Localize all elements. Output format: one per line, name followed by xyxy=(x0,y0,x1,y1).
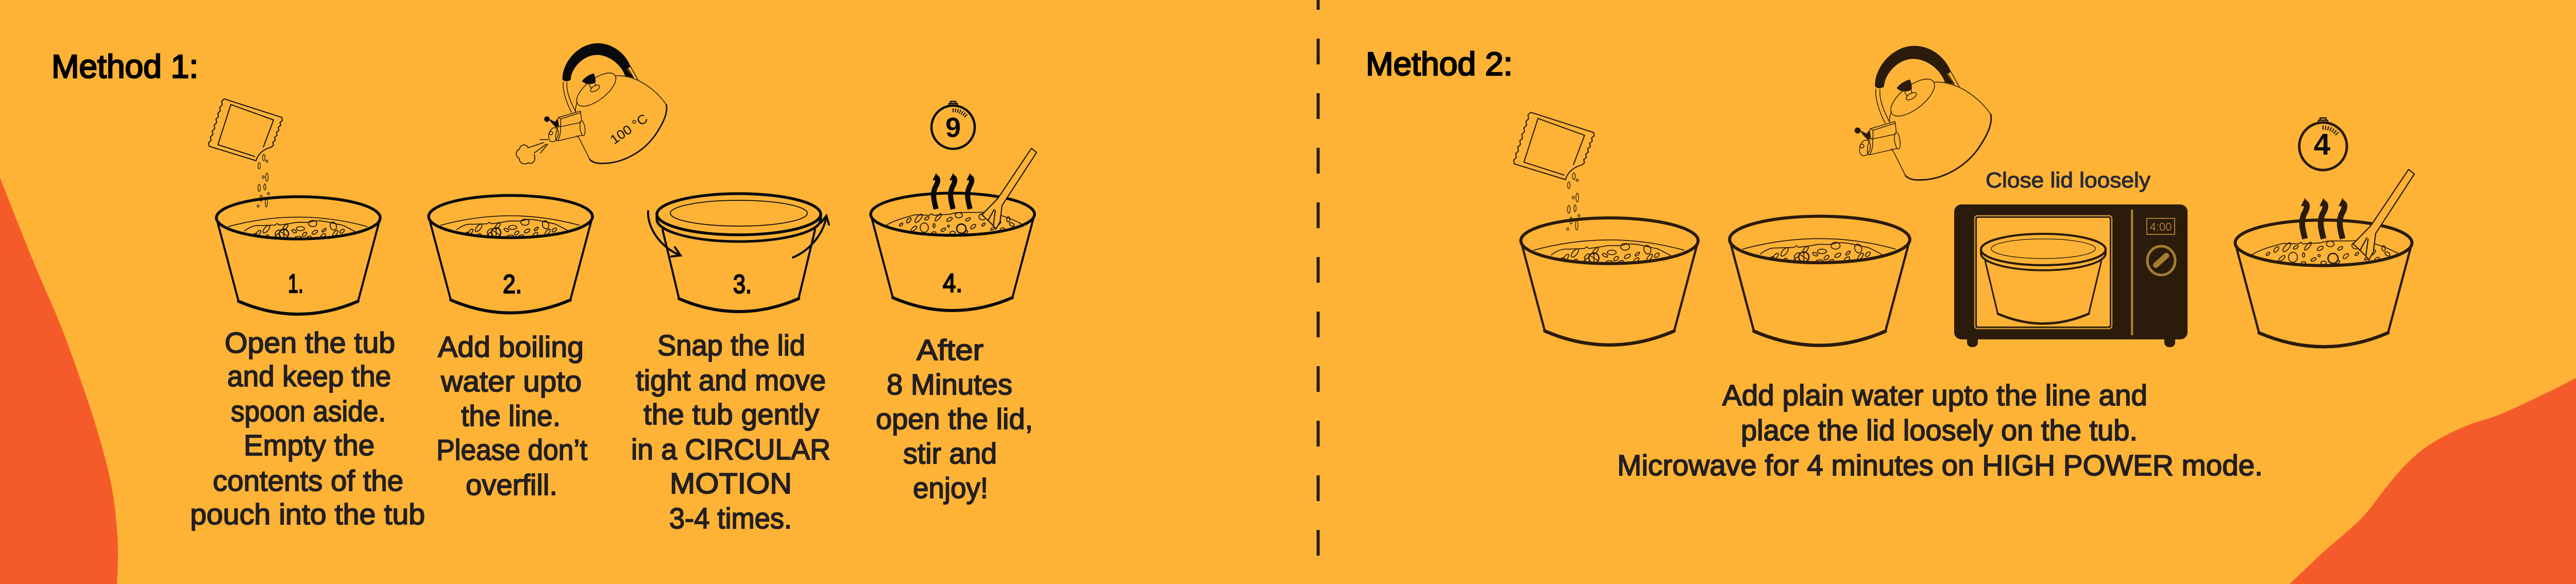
tub 2: 2. xyxy=(503,269,522,299)
step 3 text: in a CIRCULAR xyxy=(631,433,831,466)
step 4 text: enjoy! xyxy=(913,472,988,505)
step 2 text: water upto xyxy=(440,365,582,398)
dashed divider xyxy=(1317,0,1320,556)
icon: pouch pouring xyxy=(1514,112,1594,230)
step 2 text: Please don’t xyxy=(436,434,587,467)
panel: method 2 xyxy=(1366,45,2414,482)
timer 4: 4 xyxy=(2314,128,2330,161)
step 2 text xyxy=(436,331,587,502)
tub A xyxy=(1521,218,1698,345)
step 2 text: Add boiling xyxy=(438,331,584,364)
right orange corner shape xyxy=(2290,338,2576,584)
step 1 text: contents of the xyxy=(213,465,403,497)
tub B xyxy=(1730,216,1910,346)
timer 9 xyxy=(931,101,975,149)
step 3 text: Snap the lid xyxy=(657,329,805,362)
step 4 text: stir and xyxy=(903,437,997,470)
heading: method 1: Method 1: xyxy=(52,48,198,85)
heading: method 2: Method 2: xyxy=(1366,45,1513,82)
tub 4 with steam and fork: 4. xyxy=(943,268,962,298)
method 2 instructions text: Microwave for 4 minutes on HIGH POWER mode. xyxy=(1617,449,2263,482)
step 4 text: 8 Minutes xyxy=(887,368,1012,401)
step 2 text: overfill. xyxy=(466,469,557,502)
step 3 text: tight and move xyxy=(636,364,826,397)
step 1 text: and keep the xyxy=(227,360,391,393)
tub 4 with steam and fork xyxy=(871,148,1037,311)
icon: microwave with lidded tub: 4:00 xyxy=(2150,220,2172,233)
step 3 text: MOTION xyxy=(670,467,792,500)
tub 3 with lid and motion arrows xyxy=(648,194,829,312)
icon: kettle with 100 degrees: 100 °C xyxy=(607,111,651,147)
icon: pouch pouring xyxy=(209,99,282,207)
icon: kettle with 100 degrees xyxy=(516,43,667,164)
tub 1 xyxy=(216,197,380,314)
step 3 text: 3-4 times. xyxy=(669,502,792,535)
step 1 text: Open the tub xyxy=(225,327,395,359)
step 3 text: the tub gently xyxy=(643,398,819,431)
step 1 text xyxy=(190,327,425,531)
step 4 text: open the lid, xyxy=(876,403,1033,436)
timer 9: 9 xyxy=(945,112,961,143)
icon: kettle xyxy=(1855,46,1991,180)
step 4 text: After xyxy=(917,334,984,367)
tub 1: 1. xyxy=(288,269,303,298)
step 1 text: spoon aside. xyxy=(231,395,386,428)
label: close lid loosely: Close lid loosely xyxy=(1986,168,2150,192)
method 2 instructions text: place the lid loosely on the tub. xyxy=(1741,414,2138,447)
tub 3 with lid and motion arrows: 3. xyxy=(733,269,752,299)
method 2 instructions text xyxy=(1617,379,2263,482)
left orange corner shape xyxy=(0,178,118,584)
method 2 instructions text: Add plain water upto the line and xyxy=(1722,379,2147,412)
step 4 text xyxy=(876,334,1033,505)
timer 4 xyxy=(2299,118,2347,170)
step 2 text: the line. xyxy=(461,400,561,433)
step 1 text: Empty the xyxy=(244,429,375,462)
tub D with steam and fork xyxy=(2235,169,2414,347)
step 3 text xyxy=(631,329,831,535)
panel: method 1 xyxy=(52,43,1037,535)
tub 2 xyxy=(429,196,592,313)
step 1 text: pouch into the tub xyxy=(190,498,425,531)
icon: microwave with lidded tub xyxy=(1954,204,2188,347)
